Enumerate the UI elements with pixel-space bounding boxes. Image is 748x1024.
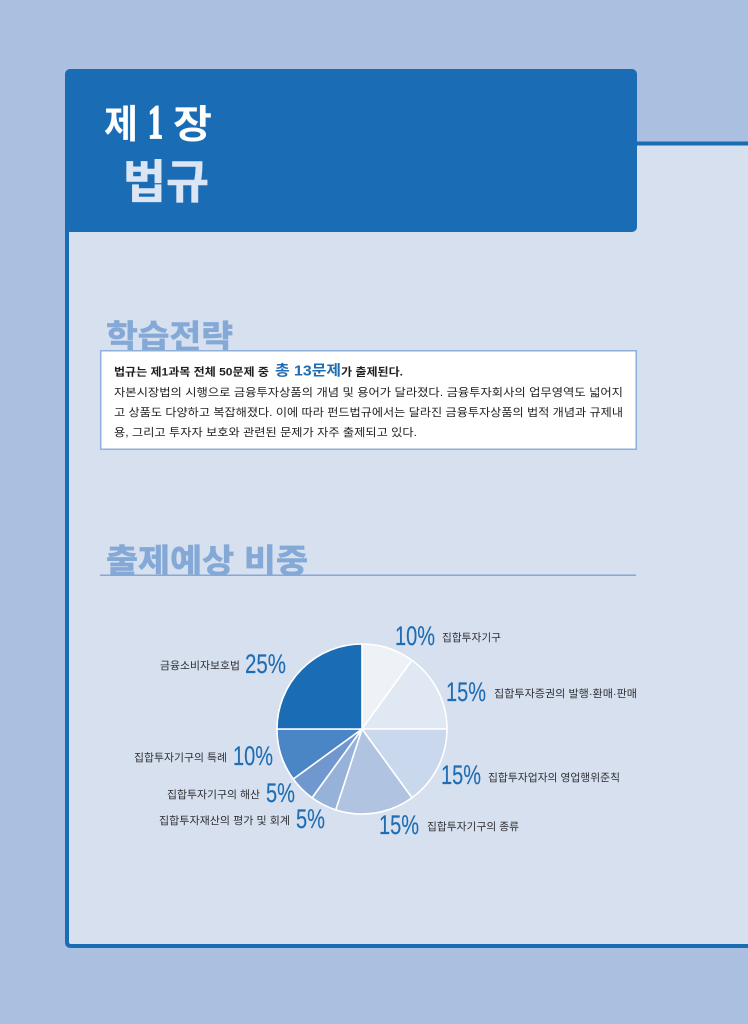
label: fund types 15% bbox=[379, 810, 519, 840]
text: body line 1: 자본시장법의 시행으로 금융투자상품의 개념 및 용어가 달라졌다. 금융투자회사의 업무영역도 넓어지 bbox=[114, 386, 623, 399]
label: fund securities issuance 15%: 집합투자증권의 발행·환매·판매 bbox=[494, 688, 637, 700]
heading: study strategy: 학습전략 bbox=[106, 319, 233, 355]
label: fund dissolution 5%: 5% bbox=[266, 778, 295, 808]
label: fund securities issuance 15% bbox=[446, 677, 637, 707]
text: highlighted question count: 총 13문제 bbox=[275, 362, 341, 380]
label: business conduct rules 15%: 집합투자업자의 영업행위준칙 bbox=[488, 771, 620, 784]
label: asset valuation and accounting 5% bbox=[159, 804, 325, 834]
label: fund types 15%: 15% bbox=[379, 810, 419, 840]
panel: page frame bbox=[67, 144, 748, 946]
label: fund securities issuance 15%: 15% bbox=[446, 677, 486, 707]
label: collective investment vehicle 10%: 10% bbox=[395, 621, 435, 651]
text: summary line end: 가 출제된다. bbox=[341, 364, 403, 378]
heading: expected question share: 출제예상 비중 bbox=[106, 543, 308, 579]
label: collective investment vehicle 10% bbox=[395, 621, 501, 651]
label: special fund rules 10% bbox=[134, 741, 273, 771]
label: fund dissolution 5% bbox=[167, 778, 295, 808]
panel: chapter header bbox=[65, 69, 637, 232]
label: special fund rules 10%: 10% bbox=[233, 741, 273, 771]
label: business conduct rules 15%: 15% bbox=[441, 760, 481, 790]
label: consumer protection 25%: 금융소비자보호법 bbox=[160, 660, 240, 672]
label: fund dissolution 5%: 집합투자기구의 해산 bbox=[167, 788, 260, 801]
label: consumer protection 25%: 25% bbox=[245, 649, 286, 679]
label: special fund rules 10%: 집합투자기구의 특례 bbox=[134, 752, 227, 764]
pie chart bbox=[277, 644, 447, 814]
label: asset valuation and accounting 5%: 집합투자재산의 평가 및 회계 bbox=[159, 815, 290, 827]
heading: chapter title: 법규 bbox=[123, 156, 209, 208]
label: consumer protection 25% bbox=[160, 649, 286, 679]
heading: chapter number: 장 bbox=[173, 104, 212, 147]
text: body line 2: 고 상품도 다양하고 복잡해졌다. 이에 따라 펀드법규에서는 달라진 금융투자상품의 법적 개념과 규제내 bbox=[114, 405, 623, 419]
heading: chapter number bbox=[104, 96, 212, 149]
panel: strategy text box bbox=[101, 351, 636, 449]
heading: chapter number: 제 bbox=[104, 104, 138, 147]
label: collective investment vehicle 10%: 집합투자기구 bbox=[442, 632, 501, 644]
label: fund types 15%: 집합투자기구의 종류 bbox=[427, 821, 519, 833]
text: body line 3: 용, 그리고 투자자 보호와 관련된 문제가 자주 출제되고 있다. bbox=[114, 426, 417, 439]
text: summary line: 법규는 제1과목 전체 50문제 중 bbox=[114, 364, 269, 378]
label: business conduct rules 15% bbox=[441, 760, 620, 790]
heading: chapter number: 1 bbox=[148, 96, 163, 149]
label: asset valuation and accounting 5%: 5% bbox=[296, 804, 325, 834]
